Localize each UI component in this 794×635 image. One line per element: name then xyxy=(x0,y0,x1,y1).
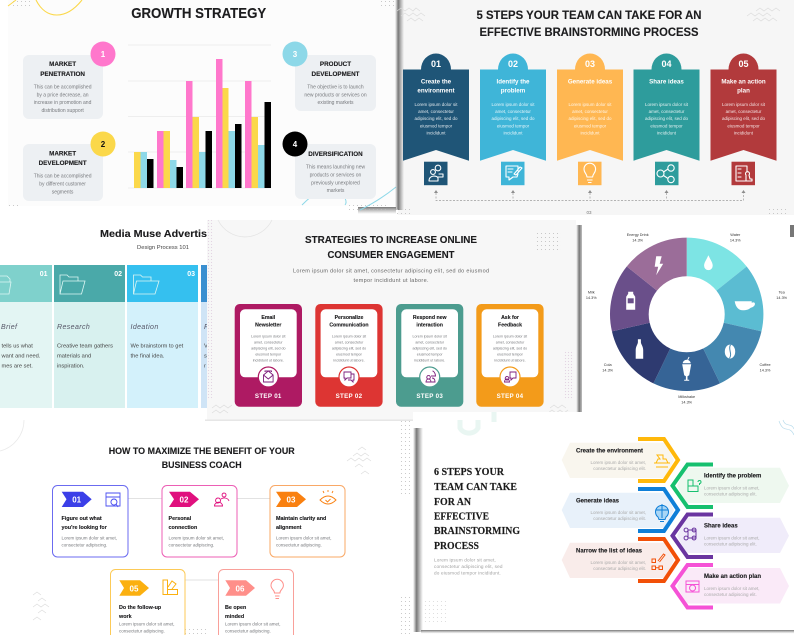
step: generate ideas: Generate ideas xyxy=(576,498,620,504)
title: 6 steps: 6 STEPS YOUR xyxy=(434,466,505,478)
card: product development: existing markets xyxy=(317,100,354,106)
icon: share nodes xyxy=(655,162,678,185)
chart labels: 14.3% xyxy=(730,238,741,242)
subtitle: Lorem ipsum dolor sit amet, consectetur adipiscing elit, sed do eiusmod xyxy=(293,268,489,274)
chart labels: Tea xyxy=(779,290,786,294)
card: ask for feedback: Ask for xyxy=(501,315,519,321)
step 02 banner: amet, consectetur xyxy=(495,109,531,114)
description xyxy=(434,558,503,576)
step: make an action plan: Lorem ipsum dolor sit amet, xyxy=(704,586,760,591)
card: product development: The objective is to launch xyxy=(307,84,364,90)
column: research: Research xyxy=(57,324,90,331)
card: personalize communication: adipiscing elit, sed do xyxy=(332,346,366,350)
card: ask for feedback: STEP 04 xyxy=(497,393,524,400)
chart labels: Energy Drink xyxy=(627,233,649,237)
card 01: you're looking for xyxy=(62,525,108,531)
panel: media muse design process xyxy=(0,215,209,415)
card: product development: 3 xyxy=(293,50,298,59)
card 05: work xyxy=(118,614,132,620)
card: market penetration: This can be accomplished xyxy=(34,84,92,90)
step 05 banner: Make an action xyxy=(721,78,766,86)
description: consectetur adipiscing elit, sed xyxy=(434,564,503,569)
card: personalize communication: Personalize xyxy=(335,315,364,321)
card 02 xyxy=(162,486,237,557)
card 01 xyxy=(52,486,128,557)
card: personalize communication: Lorem ipsum dolor sit xyxy=(332,334,366,338)
card: respond new interaction: incididunt ut labore. xyxy=(414,358,445,362)
chart labels: Coffee xyxy=(759,363,771,367)
card: email newsletter: Newsletter xyxy=(255,322,281,328)
panel: online consumer engagement xyxy=(207,220,585,420)
step: identify the problem xyxy=(672,464,789,507)
card: market penetration: PENETRATION xyxy=(40,71,85,78)
icon: water drop xyxy=(704,255,713,270)
card: personalize communication: eiusmod tempor xyxy=(336,352,363,356)
card: market penetration: 1 xyxy=(101,50,106,59)
step 01 banner: Create the xyxy=(421,78,452,86)
title: 6 steps: PROCESS xyxy=(434,540,479,552)
step: create the environment xyxy=(562,439,678,481)
icon: energy bolt xyxy=(655,256,663,275)
step 03 banner: 03 xyxy=(585,59,595,69)
column: ideation: Ideation xyxy=(130,324,159,331)
step: create the environment: Create the environment xyxy=(576,448,643,454)
card: respond new interaction: amet, consectetur xyxy=(415,340,445,344)
subtitle: tempor incididunt ut labore. xyxy=(354,278,429,284)
step 02 banner: Lorem ipsum dolor sit xyxy=(491,102,535,107)
card 03 xyxy=(270,486,345,557)
title: 6 steps: TEAM CAN TAKE xyxy=(434,481,517,493)
card: email newsletter: adipiscing elit, sed do xyxy=(251,346,285,350)
card: respond new interaction xyxy=(396,304,463,407)
card: market penetration: increase in promotion and xyxy=(34,100,92,106)
panel: 5 steps brainstorming xyxy=(395,0,794,216)
step 01 banner: 01 xyxy=(431,59,441,69)
card: email newsletter: incididunt ut labore. xyxy=(253,358,284,362)
icon: milkshake xyxy=(682,357,691,381)
column: clipped fourth: F xyxy=(204,324,209,331)
title: business coach: HOW TO MAXIMIZE THE BENEFIT OF YOUR xyxy=(109,446,295,457)
card: personalize communication: incididunt ut labore. xyxy=(333,358,365,362)
card: diversification: This means launching new xyxy=(306,164,365,170)
card 06 xyxy=(218,570,294,635)
card: market penetration: by a price decrease, an xyxy=(37,92,89,98)
column: ideation: the final idea. xyxy=(130,354,165,360)
step 03 banner xyxy=(557,54,623,161)
card 05: consectetur adipiscing. xyxy=(119,629,165,634)
icon: tea cup xyxy=(735,301,755,310)
card: ask for feedback: amet, consectetur xyxy=(496,340,525,344)
chart labels: 14.3% xyxy=(602,368,614,372)
step: share ideas: Lorem ipsum dolor sit amet, xyxy=(704,536,760,540)
step 04 banner xyxy=(634,54,700,161)
card 03: consectetur adipiscing. xyxy=(276,542,322,548)
bar chart xyxy=(128,45,271,188)
card 01: Lorem ipsum dolor sit amet, xyxy=(62,536,117,540)
subtitle xyxy=(293,268,489,284)
card 01: 01 xyxy=(72,496,82,504)
step 01 banner: Lorem ipsum dolor sit xyxy=(414,102,458,107)
card: diversification: previously unexplored xyxy=(311,180,360,186)
card 06: 06 xyxy=(236,584,245,593)
panel: business coach xyxy=(0,420,414,635)
card: ask for feedback: Feedback xyxy=(498,322,522,328)
title: 6 steps: BRAINSTORMING xyxy=(434,525,520,537)
chart labels: Cola xyxy=(604,363,612,367)
card: market development: DEVELOPMENT xyxy=(39,160,87,167)
column: brief: Brief xyxy=(1,324,18,331)
step 01 banner: adipiscing elit, sed do xyxy=(414,116,458,121)
step: make an action plan xyxy=(672,565,789,608)
card: ask for feedback: adipiscing elit, sed do xyxy=(493,346,527,350)
step 02 banner xyxy=(480,54,546,161)
column: clipped fourth: r xyxy=(204,364,206,370)
card: diversification: DIVERSIFICATION xyxy=(308,151,363,158)
card 02: Personal xyxy=(168,516,192,522)
step 03 banner: adipiscing elit, sed do xyxy=(568,116,612,121)
card: email newsletter: Email xyxy=(261,315,276,321)
step 03 banner: Lorem ipsum dolor sit xyxy=(568,102,612,107)
card 03: 03 xyxy=(287,496,296,504)
step 02 banner: adipiscing elit, sed do xyxy=(491,116,535,121)
step 04 banner: incididunt xyxy=(657,130,677,136)
white gap under top row xyxy=(424,215,794,227)
description: Lorem ipsum dolor sit amet, xyxy=(434,558,496,562)
card: market development: MARKET xyxy=(49,150,76,158)
card: respond new interaction: interaction xyxy=(416,322,443,328)
column: brief: mes are set. xyxy=(2,364,33,370)
title: business coach: BUSINESS COACH xyxy=(162,460,242,471)
chart labels xyxy=(586,233,788,404)
card 02: Lorem ipsum dolor sit amet, xyxy=(168,536,224,540)
title: business coach xyxy=(109,446,295,471)
column: research: 02 xyxy=(114,271,122,278)
column: research: Creative team gathers xyxy=(57,344,113,350)
card 02: consectetur adipiscing. xyxy=(168,542,214,548)
icon: light bulb xyxy=(578,162,602,185)
step: share ideas: consectetur adipiscing elit. xyxy=(704,542,757,546)
column: ideation: We brainstorm to get xyxy=(130,344,184,350)
title: media muse: Media Muse Advertis xyxy=(100,228,207,240)
step: narrow the list of ideas: Narrow the list of ideas xyxy=(576,548,643,554)
step 01 banner: environment xyxy=(417,88,455,94)
card 03: alignment xyxy=(276,525,302,531)
card 05 xyxy=(110,570,185,635)
title: 5 steps: EFFECTIVE BRAINSTORMING PROCESS xyxy=(480,25,698,39)
card 01: consectetur adipiscing. xyxy=(62,542,107,548)
card: product development: DEVELOPMENT xyxy=(312,71,360,78)
card: market development: 2 xyxy=(101,140,106,149)
card: product development: PRODUCT xyxy=(320,61,351,68)
card: ask for feedback: eiusmod tempor xyxy=(497,352,524,356)
step 05 banner: amet, consectetur xyxy=(726,109,762,114)
step 04 banner: adipiscing elit, sed do xyxy=(645,116,689,121)
dashed connector arrows xyxy=(434,190,746,200)
step 04 banner: amet, consectetur xyxy=(649,109,685,114)
icon: cola bottle xyxy=(636,339,643,359)
column: brief xyxy=(0,265,52,408)
card: personalize communication: STEP 02 xyxy=(336,393,363,400)
step 02 banner: Identify the xyxy=(496,78,530,86)
step 01 banner: incididunt xyxy=(426,130,446,136)
card 01: Figure out what xyxy=(62,516,102,522)
column: brief: want and need. xyxy=(0,354,41,360)
card: email newsletter: eiusmod tempor xyxy=(255,352,282,356)
panel: 6 steps brainstorming xyxy=(413,412,794,634)
card: email newsletter: Lorem ipsum dolor sit xyxy=(251,334,285,338)
step: create the environment: consectetur adipiscing elit. xyxy=(593,466,646,471)
title: strategies: STRATEGIES TO INCREASE ONLINE xyxy=(305,234,477,246)
card 06: minded xyxy=(225,614,244,620)
step: share ideas xyxy=(672,514,789,557)
card: personalize communication xyxy=(315,304,383,407)
donut chart xyxy=(610,238,763,391)
step 01 banner: amet, consectetur xyxy=(418,109,454,114)
column: brief: 01 xyxy=(40,271,48,278)
chart labels: Water xyxy=(730,233,741,237)
card 06: Lorem ipsum dolor sit amet, xyxy=(225,622,281,627)
title: 5 steps xyxy=(476,8,702,39)
step 04 banner: Share ideas xyxy=(649,78,684,86)
step 03 banner: Generate ideas xyxy=(568,78,613,86)
step 04 banner: Lorem ipsum dolor sit xyxy=(645,102,689,107)
title: strategies: CONSUMER ENGAGEMENT xyxy=(328,249,455,261)
step 03 banner: incididunt xyxy=(580,130,600,136)
chart labels: Milkshake xyxy=(678,395,695,399)
step: make an action plan: Make an action plan xyxy=(704,574,761,580)
card: respond new interaction: adipiscing elit, sed do xyxy=(413,346,447,350)
subtitle: Design Process 101 xyxy=(137,245,189,251)
step 03 banner: eiusmod tempor xyxy=(574,124,607,128)
icon: milk bottle xyxy=(626,292,635,310)
step: narrow the list of ideas: consectetur adipiscing elit. xyxy=(593,566,646,571)
step 04 banner: eiusmod tempor xyxy=(650,124,683,128)
card 06: consectetur adipiscing. xyxy=(225,629,271,634)
card: market development: by different customer xyxy=(39,182,86,188)
card: product development xyxy=(282,42,376,111)
icon: note and pen xyxy=(501,162,524,185)
card: respond new interaction: eiusmod tempor xyxy=(417,352,443,356)
card 02: 02 xyxy=(180,496,189,504)
card 03: Lorem ipsum dolor sit amet, xyxy=(276,536,332,540)
card: product development: new products or services on xyxy=(304,92,367,98)
column: ideation: 03 xyxy=(187,271,195,278)
step 05 banner: incididunt xyxy=(734,130,754,136)
card: respond new interaction: Respond new xyxy=(413,315,448,321)
icon: coffee bean xyxy=(725,345,735,359)
title: growth strategy: GROWTH STRATEGY xyxy=(131,5,266,22)
step: generate ideas xyxy=(562,489,678,531)
step: identify the problem: Lorem ipsum dolor sit amet, xyxy=(704,486,760,490)
step 02 banner: problem xyxy=(501,88,526,94)
card: respond new interaction: STEP 03 xyxy=(416,393,443,400)
chart labels: 14.3% xyxy=(760,368,771,372)
card: market penetration: MARKET xyxy=(49,61,76,68)
column: research: inspiration. xyxy=(57,364,85,370)
step: make an action plan: consectetur adipiscing elit. xyxy=(704,592,757,597)
step: identify the problem: consectetur adipiscing elit. xyxy=(704,492,757,496)
icon: people xyxy=(424,162,448,185)
chart labels: 14.3% xyxy=(776,296,788,300)
step 01 banner xyxy=(403,54,469,161)
step: narrow the list of ideas xyxy=(562,539,678,581)
card: market development xyxy=(23,132,116,201)
card: personalize communication: amet, consectetur xyxy=(335,340,364,344)
step 01 banner: eiusmod tempor xyxy=(420,124,453,128)
card 05: 05 xyxy=(130,584,139,593)
step 05 banner: eiusmod tempor xyxy=(727,124,760,128)
icon: clipboard checklist xyxy=(732,162,755,185)
card: personalize communication: Communication xyxy=(329,322,369,328)
column: research xyxy=(54,265,125,408)
card: diversification: products or services on xyxy=(310,172,362,178)
step 02 banner: 02 xyxy=(508,59,518,69)
step: generate ideas: consectetur adipiscing elit. xyxy=(593,516,646,521)
step: create the environment: Lorem ipsum dolor sit amet, xyxy=(590,460,646,465)
step: share ideas: Share ideas xyxy=(704,524,738,530)
column: ideation xyxy=(127,265,198,408)
column: clipped fourth xyxy=(201,265,209,408)
step: identify the problem: Identify the problem xyxy=(704,474,761,480)
chart labels: 14.3% xyxy=(681,400,693,404)
step 03 banner: amet, consectetur xyxy=(572,109,608,114)
chart labels: 14.3% xyxy=(632,238,644,242)
column: brief: tells us what xyxy=(2,344,33,350)
card: email newsletter: amet, consectetur xyxy=(254,340,283,344)
card: market development: This can be accomplished xyxy=(34,174,92,180)
step 04 banner: 04 xyxy=(661,59,672,69)
card 06: Be open xyxy=(225,605,246,611)
card: market penetration xyxy=(23,42,116,119)
column: clipped fourth: V xyxy=(204,344,208,350)
card 03: Maintain clarity and xyxy=(276,516,326,522)
card: market development: segments xyxy=(52,190,74,196)
column: research: materials and xyxy=(57,354,91,360)
step 05 banner xyxy=(710,54,776,161)
chart labels: Milk xyxy=(588,290,595,294)
step: narrow the list of ideas: Lorem ipsum dolor sit amet, xyxy=(590,560,646,565)
panel: drinks donut chart xyxy=(582,225,794,412)
connector lines xyxy=(128,498,270,580)
step: generate ideas: Lorem ipsum dolor sit amet, xyxy=(590,510,646,515)
card 05: Do the follow-up xyxy=(119,605,162,611)
card: ask for feedback xyxy=(476,304,544,407)
step 02 banner: eiusmod tempor xyxy=(497,124,530,128)
title: 6 steps: FOR AN xyxy=(434,496,471,508)
title: 6 steps: EFFECTIVE xyxy=(434,510,489,522)
card 05: Lorem ipsum dolor sit amet, xyxy=(119,622,175,627)
card 02: connection xyxy=(168,525,197,531)
panel: growth strategy xyxy=(8,0,396,214)
card: ask for feedback: incididunt ut labore. xyxy=(494,358,526,362)
step 05 banner: adipiscing elit, sed do xyxy=(722,116,766,121)
title: 6 steps xyxy=(434,466,520,552)
step 05 banner: 05 xyxy=(738,59,749,69)
step 02 banner: incididunt xyxy=(503,130,523,136)
chart labels: 14.3% xyxy=(586,296,597,300)
description: do eiusmod tempor incididunt. xyxy=(434,570,501,576)
card: diversification: markets xyxy=(327,188,345,194)
card: diversification: 4 xyxy=(293,140,298,149)
step 05 banner: Lorem ipsum dolor sit xyxy=(722,102,766,107)
step 05 banner: plan xyxy=(737,88,750,94)
title: strategies xyxy=(305,234,477,261)
card: respond new interaction: Lorem ipsum dolor sit xyxy=(413,334,447,338)
column: clipped fourth: s xyxy=(204,354,207,360)
card: email newsletter xyxy=(235,304,302,407)
card: diversification xyxy=(282,132,376,199)
card: market penetration: distribution support xyxy=(41,108,84,114)
card: ask for feedback: Lorem ipsum dolor sit xyxy=(493,334,527,338)
title: 5 steps: 5 STEPS YOUR TEAM CAN TAKE FOR AN xyxy=(476,8,702,22)
card: email newsletter: STEP 01 xyxy=(255,393,282,400)
page number: 03 xyxy=(586,210,592,215)
